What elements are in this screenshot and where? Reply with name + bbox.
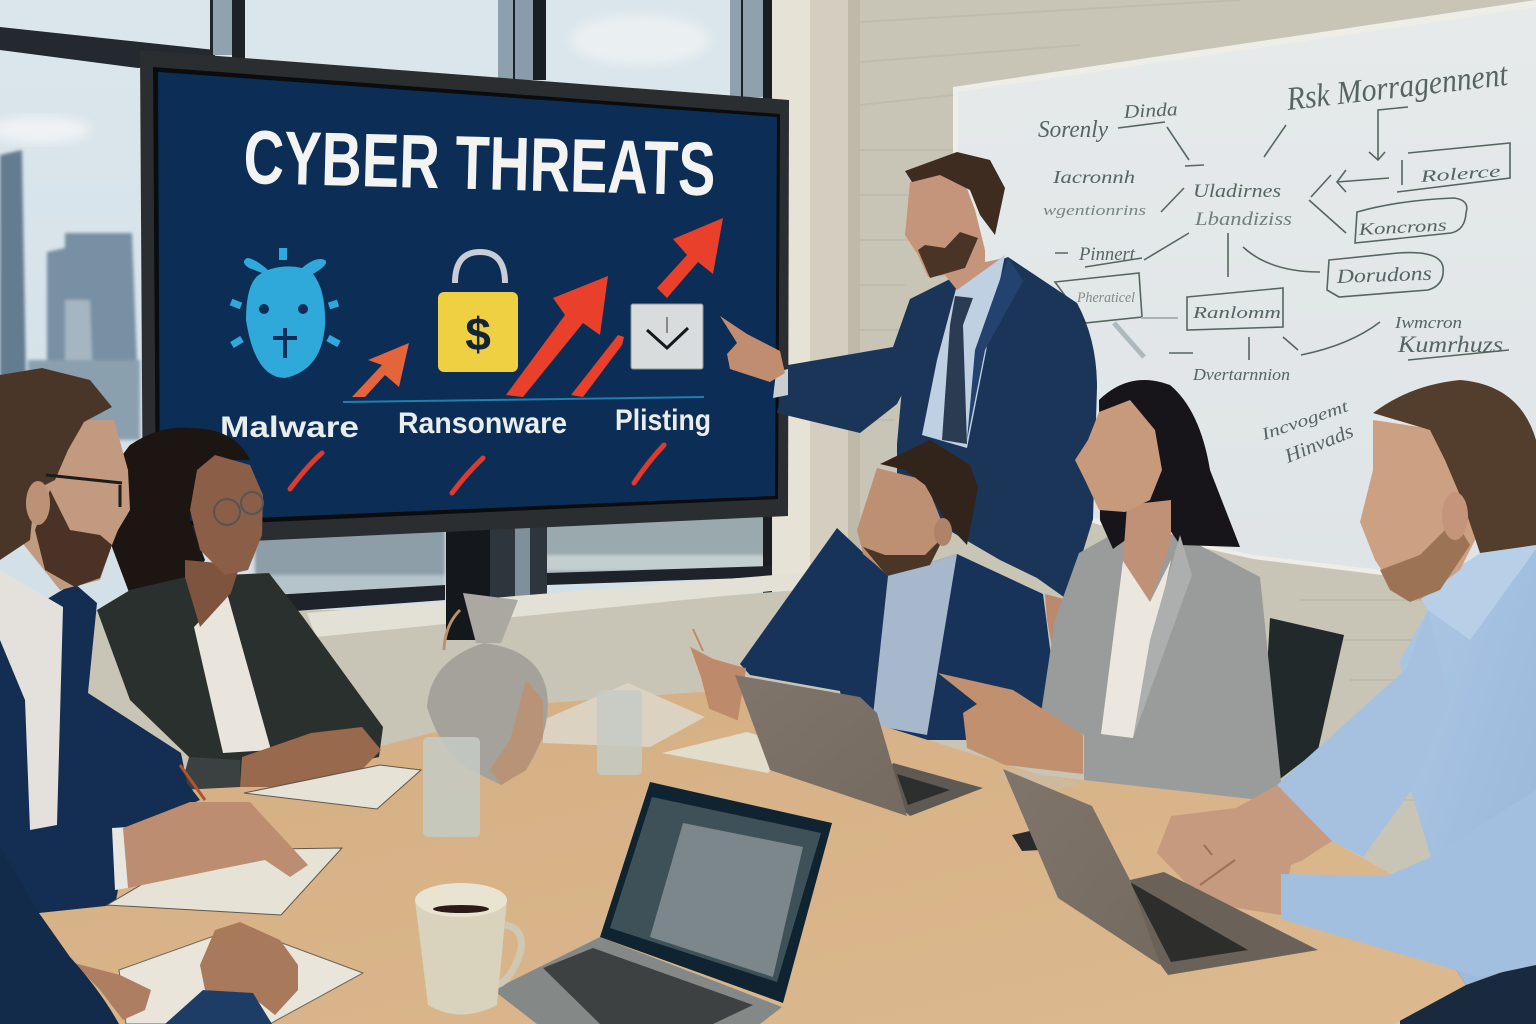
woman blouse — [1101, 560, 1171, 738]
woman hand — [938, 673, 1083, 774]
back notebooks — [543, 683, 705, 747]
handwritten notes: Iacronnh — [1052, 167, 1135, 187]
front notebook — [119, 927, 363, 1024]
icon: ransomware lock: $ — [465, 308, 491, 360]
presenter pointing hand — [720, 316, 785, 382]
presenter hair — [905, 152, 1005, 235]
front fist — [200, 922, 298, 1015]
screen title: CYBER THREATS — [243, 115, 717, 212]
presenter lapel — [967, 257, 1023, 440]
left woman jacket — [97, 573, 383, 787]
label: Malware: Malware — [220, 411, 359, 444]
stripe: red — [571, 335, 624, 397]
handwritten notes: Koncrons — [1357, 215, 1448, 239]
centre man hair — [880, 440, 978, 545]
left woman — [97, 428, 383, 790]
table — [39, 692, 1466, 1024]
arrow: small orange — [352, 343, 409, 397]
seated woman — [1041, 380, 1284, 810]
face — [1360, 420, 1480, 600]
left woman neck — [185, 560, 240, 627]
handwritten notes — [1038, 57, 1510, 468]
diagram lines and boxes — [1055, 107, 1510, 360]
notebook left woman — [244, 765, 421, 809]
handwritten notes: Dorudons — [1335, 263, 1432, 288]
left man jacket — [0, 583, 200, 920]
woman hair — [1099, 380, 1240, 549]
icon: ransomware lock — [438, 252, 518, 372]
presenter shirt — [922, 255, 1005, 448]
collar — [1415, 515, 1536, 640]
water glasses — [423, 690, 642, 837]
arrow: large red — [506, 276, 608, 397]
handwritten notes: Pheraticel — [1076, 290, 1135, 306]
left woman glasses — [214, 492, 263, 525]
centre man face — [857, 468, 945, 574]
handwritten notes: Lbandiziss — [1194, 209, 1292, 230]
coffee mug — [415, 883, 521, 1014]
left woman sleeve — [180, 757, 240, 790]
left man cuff — [112, 827, 128, 890]
right man arm and sleeve — [1157, 610, 1536, 977]
handwritten notes: wgentionrins — [1043, 203, 1146, 219]
centre man shirt — [872, 554, 957, 735]
presenter coat — [897, 257, 1097, 600]
window sill — [307, 572, 812, 637]
handwritten notes: Rsk Morragennent — [1284, 57, 1510, 118]
front arm — [0, 847, 119, 1024]
man right head — [1360, 380, 1536, 640]
lower sleeve — [1281, 790, 1536, 977]
presenter face — [905, 170, 1000, 290]
woman blazer — [1041, 530, 1284, 810]
lower view — [255, 515, 770, 597]
presenter arm — [777, 299, 925, 433]
hair — [1373, 380, 1536, 553]
woman face — [1075, 400, 1162, 512]
window with city view — [0, 0, 772, 611]
woman neck — [1123, 500, 1171, 602]
seated man centre — [740, 440, 1052, 740]
laptop: right — [1003, 769, 1318, 975]
presenter cuff — [773, 369, 788, 398]
window reveal — [772, 0, 810, 600]
laptop: middle — [735, 675, 983, 816]
left man — [0, 368, 205, 920]
arrow: upper red — [657, 218, 723, 298]
label: Ransonware: Ransonware — [398, 407, 567, 440]
bust prop with bag — [427, 593, 548, 785]
presenter — [720, 152, 1097, 647]
handwritten notes: Sorenly — [1038, 117, 1108, 143]
presenter lower hand — [1045, 594, 1068, 647]
handwritten notes: Pinnert — [1078, 244, 1136, 265]
left man face — [20, 420, 130, 590]
window frames — [0, 27, 215, 68]
handwritten notes: Rolerce — [1418, 161, 1502, 186]
screen mount pole — [446, 520, 490, 640]
handwritten notes: Kumrhuzs — [1397, 332, 1503, 357]
left man hair — [0, 368, 112, 560]
centre man coat — [740, 528, 1052, 740]
laptop: front — [493, 782, 832, 1024]
label: Plisting: Plisting — [615, 404, 711, 437]
wall under window — [300, 585, 860, 760]
handwritten notes: Dinda — [1122, 99, 1178, 123]
notebook under woman hand — [1000, 768, 1083, 790]
presentation screen — [140, 50, 789, 546]
handwritten notes: Hinvads — [1281, 420, 1357, 468]
handwritten notes: Incvogemt — [1258, 396, 1352, 444]
upper sleeve — [1277, 610, 1450, 857]
handwritten notes: Iwmcron — [1394, 313, 1462, 332]
beard — [1380, 520, 1470, 602]
centre man hand — [692, 629, 745, 719]
left man beard — [35, 490, 112, 587]
pencil — [180, 765, 205, 800]
left man shirt — [0, 570, 63, 830]
handwritten notes: Dvertarnnion — [1192, 365, 1290, 384]
notebook left man — [107, 848, 342, 915]
small red ticks — [290, 445, 664, 493]
skyline — [0, 150, 140, 440]
notebook middle — [662, 732, 790, 773]
whiteboard — [953, 0, 1536, 575]
forearm and hands — [1157, 785, 1332, 915]
left man glasses — [46, 475, 122, 507]
presenter tie — [942, 296, 973, 444]
left man hand on notebook — [123, 802, 308, 888]
handwritten notes: Uladirnes — [1193, 181, 1281, 202]
icon: malware bug — [231, 248, 339, 378]
divider line — [343, 396, 704, 403]
presenter beard — [918, 232, 978, 278]
woman lapel — [1133, 535, 1192, 738]
handwritten notes: Ranlomm — [1192, 303, 1281, 322]
icon: phishing envelope — [631, 304, 703, 369]
left woman hands — [240, 727, 381, 787]
left woman face — [190, 455, 263, 575]
front left person — [0, 847, 298, 1024]
left woman blouse — [194, 593, 271, 753]
man right torso — [1394, 549, 1536, 1024]
chair — [1264, 618, 1344, 779]
phone — [1012, 830, 1040, 851]
centre man beard — [863, 535, 945, 576]
front sleeve — [165, 990, 272, 1024]
left woman hair — [109, 428, 250, 595]
front hand small — [74, 963, 151, 1020]
